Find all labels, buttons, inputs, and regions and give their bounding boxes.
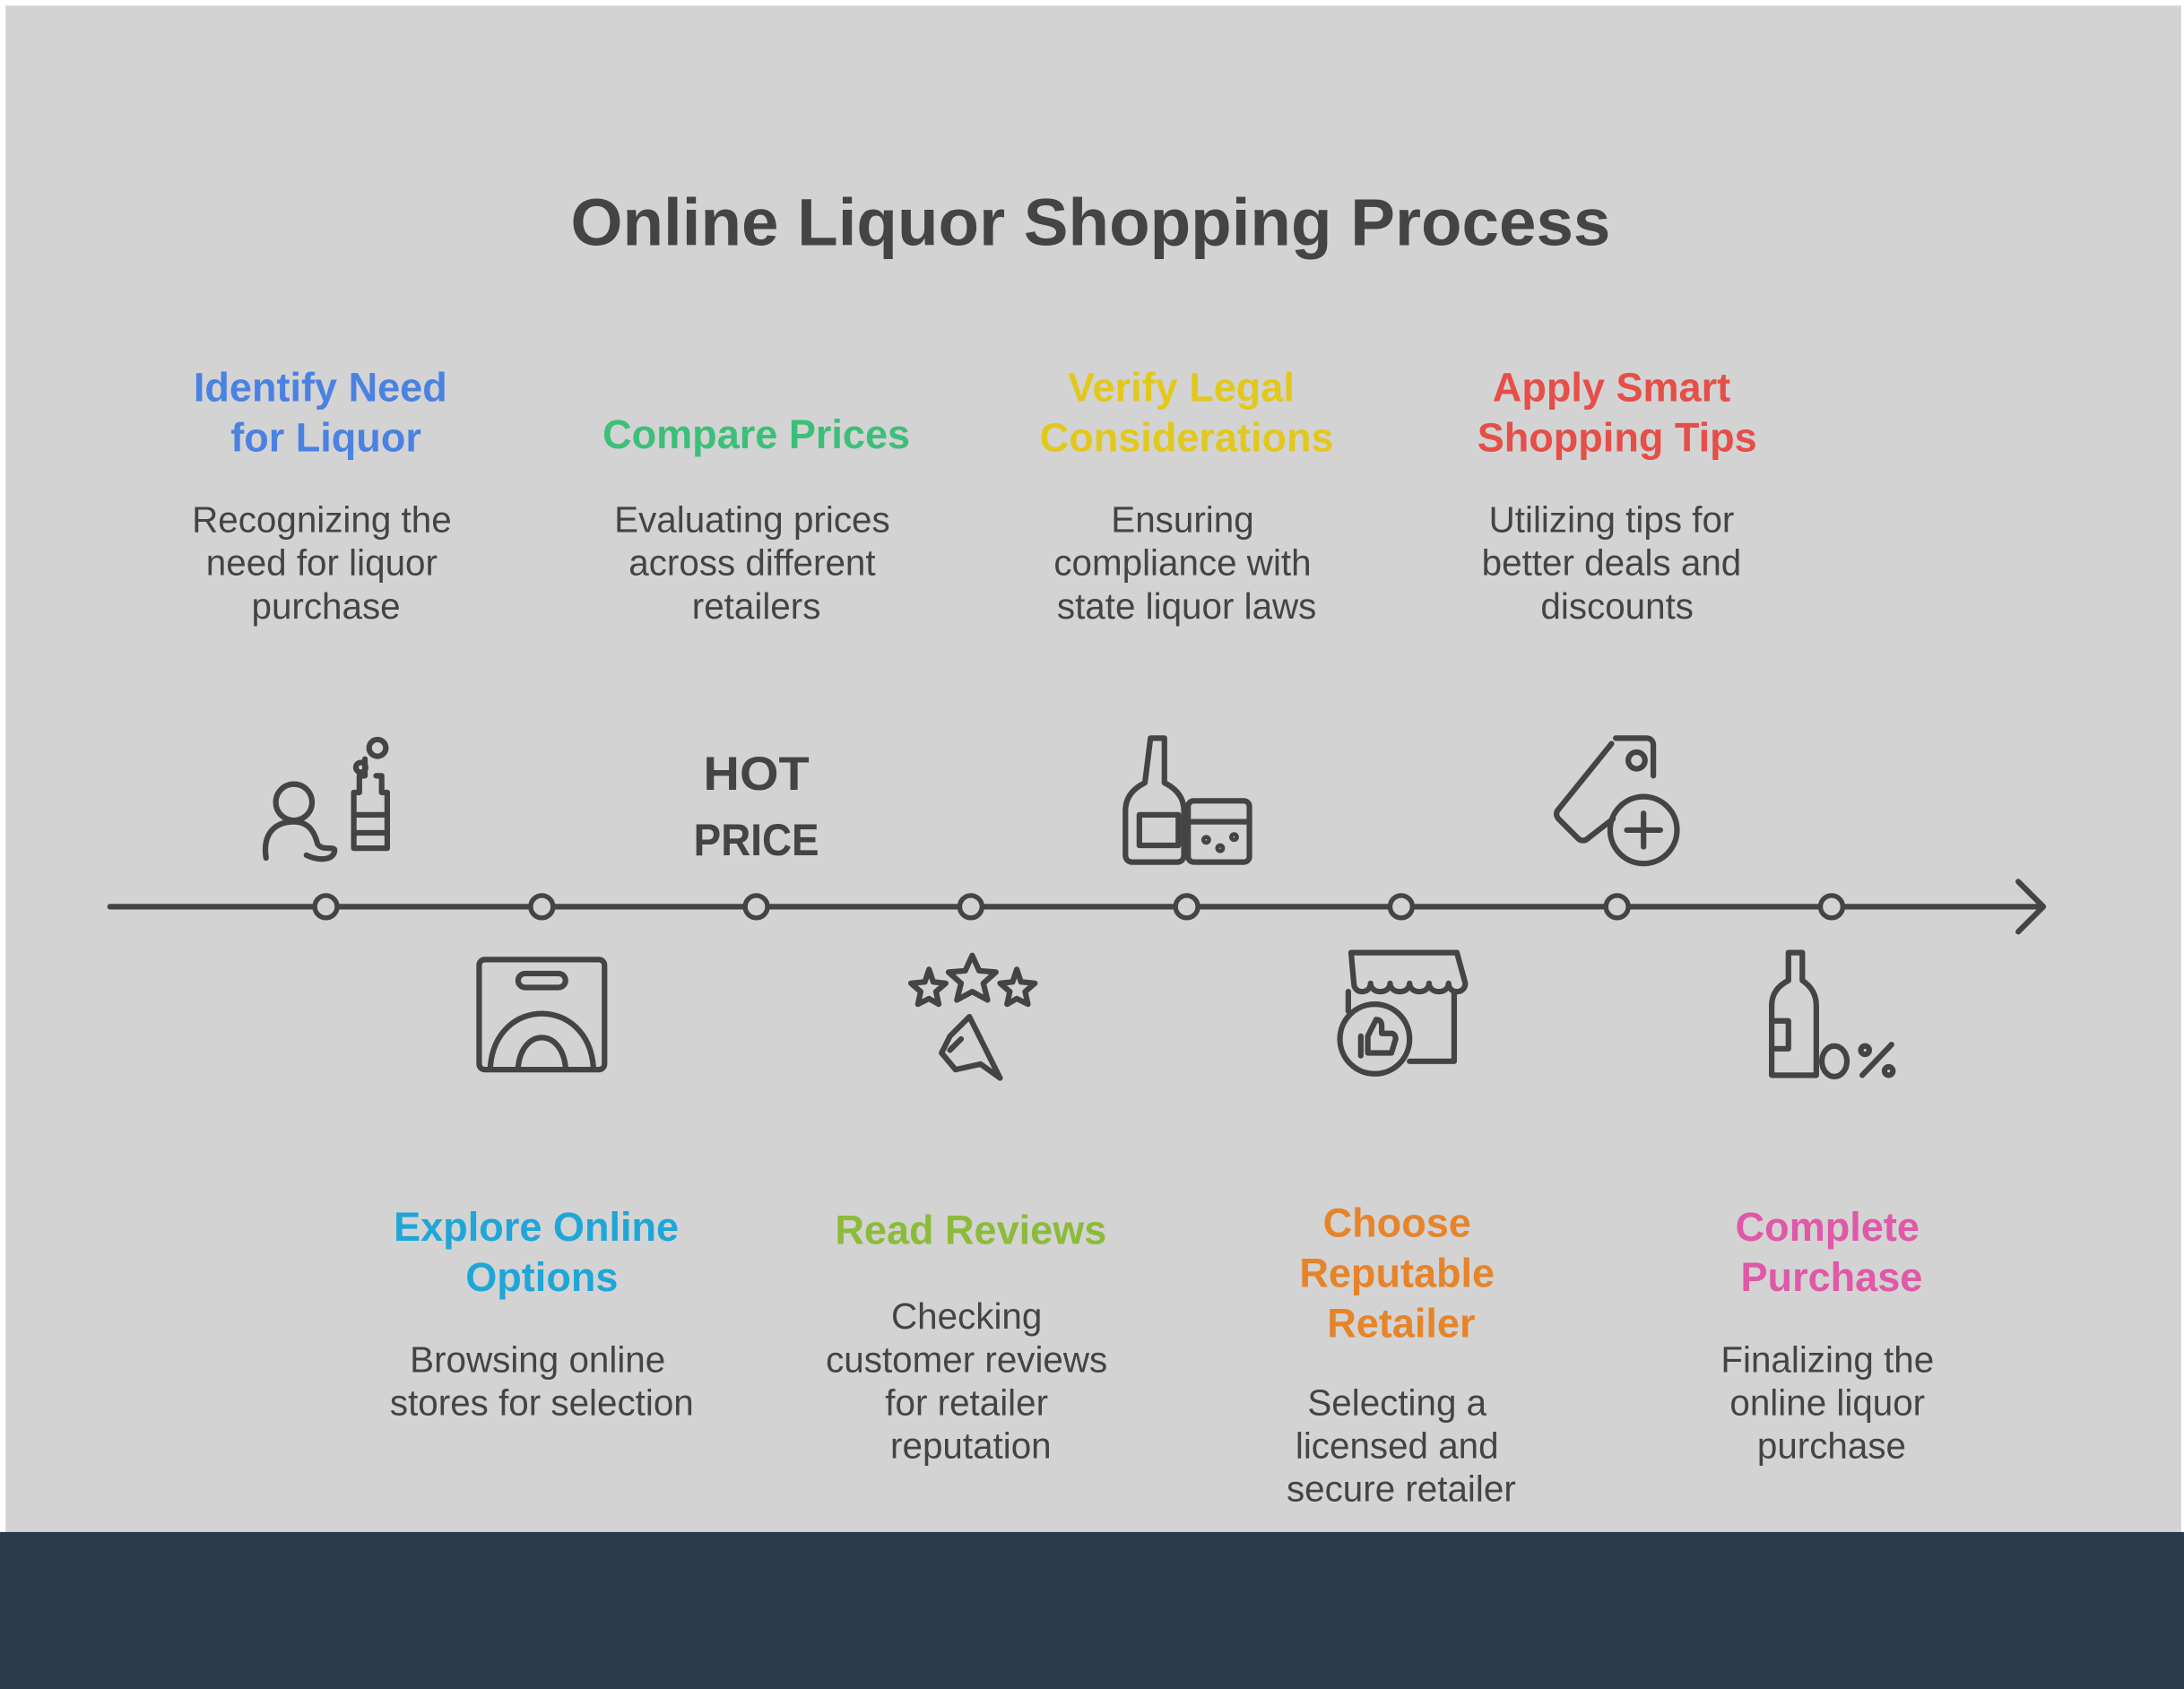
step 4: Read Reviews: Checking [891, 1295, 1042, 1337]
step 3: Compare Prices [602, 411, 910, 627]
step 7: Apply Smart Shopping Tips: discounts [1540, 585, 1694, 627]
step 5: Verify Legal Considerations: Verify Legal [1068, 364, 1295, 410]
step 7: Apply Smart Shopping Tips: Apply Smart [1493, 364, 1730, 410]
step 7: Apply Smart Shopping Tips: better deals and [1482, 542, 1741, 584]
step 8: Complete Purchase [1720, 1204, 1934, 1467]
step 5: Verify Legal Considerations [1040, 364, 1334, 627]
step 2: Explore Online Options: Explore Online [394, 1204, 679, 1250]
step 2: Explore Online Options: stores for selection [390, 1382, 694, 1423]
icon: hot price: PRICE [694, 815, 819, 865]
step 6: Choose Reputable Retailer: Selecting a [1307, 1382, 1487, 1423]
step 8: Complete Purchase: Finalizing the [1720, 1338, 1934, 1380]
icon: person with bottle [265, 740, 387, 859]
step 6: Choose Reputable Retailer: Reputable [1299, 1250, 1495, 1295]
step 5: Verify Legal Considerations: Considerations [1040, 414, 1334, 460]
step 6: Choose Reputable Retailer: licensed and [1296, 1425, 1499, 1467]
step 3: Compare Prices: Evaluating prices [614, 498, 890, 540]
step 5: Verify Legal Considerations: compliance with [1053, 542, 1312, 584]
step 8: Complete Purchase: Purchase [1741, 1254, 1922, 1300]
timeline arrow [110, 881, 2043, 931]
step 7: Apply Smart Shopping Tips [1478, 364, 1757, 627]
step 4: Read Reviews: for retailer [885, 1382, 1048, 1423]
step 6: Choose Reputable Retailer: Retailer [1327, 1300, 1476, 1346]
step 7: Apply Smart Shopping Tips: Utilizing tips for [1489, 498, 1734, 540]
step 2: Explore Online Options [390, 1204, 694, 1423]
step 1: Identify Need: need for liquor [206, 542, 438, 584]
step 2: Explore Online Options: Options [465, 1254, 618, 1300]
step 8: Complete Purchase: Complete [1736, 1204, 1920, 1250]
step 1: Identify Need: purchase [251, 585, 401, 627]
step 8: Complete Purchase: purchase [1757, 1425, 1906, 1467]
step 5: Verify Legal Considerations: state liquor laws [1057, 585, 1316, 627]
step 3: Compare Prices: Compare Prices [602, 411, 910, 457]
step 1: Identify Need: Identify Need [194, 364, 447, 410]
step 7: Apply Smart Shopping Tips: Shopping Tips [1478, 414, 1757, 460]
icon: tag with plus [1556, 738, 1677, 863]
icon: bottle 0% [1772, 953, 1893, 1077]
step 6: Choose Reputable Retailer [1287, 1200, 1516, 1510]
step 4: Read Reviews: reputation [890, 1425, 1052, 1467]
step 6: Choose Reputable Retailer: secure retailer [1287, 1468, 1516, 1510]
step 1: Identify Need: for Liquor [230, 414, 421, 460]
title: Online Liquor Shopping Process [570, 184, 1610, 259]
step 4: Read Reviews: Read Reviews [835, 1207, 1106, 1252]
step 1: Identify Need [192, 364, 452, 627]
step 1: Identify Need: Recognizing the [192, 498, 452, 540]
icon: shopping box [479, 959, 604, 1070]
icon: bottle and glass [1125, 738, 1250, 862]
icon: hot price: HOT [704, 748, 810, 801]
step 3: Compare Prices: retailers [692, 585, 820, 627]
step 5: Verify Legal Considerations: Ensuring [1111, 498, 1254, 540]
icon: hot price [694, 748, 819, 865]
step 4: Read Reviews: customer reviews [826, 1338, 1107, 1380]
icon: stars and megaphone [911, 956, 1035, 1078]
step 8: Complete Purchase: online liquor [1729, 1382, 1925, 1423]
step 4: Read Reviews [826, 1207, 1107, 1467]
step 2: Explore Online Options: Browsing online [410, 1338, 665, 1380]
step 6: Choose Reputable Retailer: Choose [1323, 1200, 1471, 1246]
step 3: Compare Prices: across different [628, 542, 876, 584]
icon: store with thumbs up [1340, 953, 1465, 1074]
